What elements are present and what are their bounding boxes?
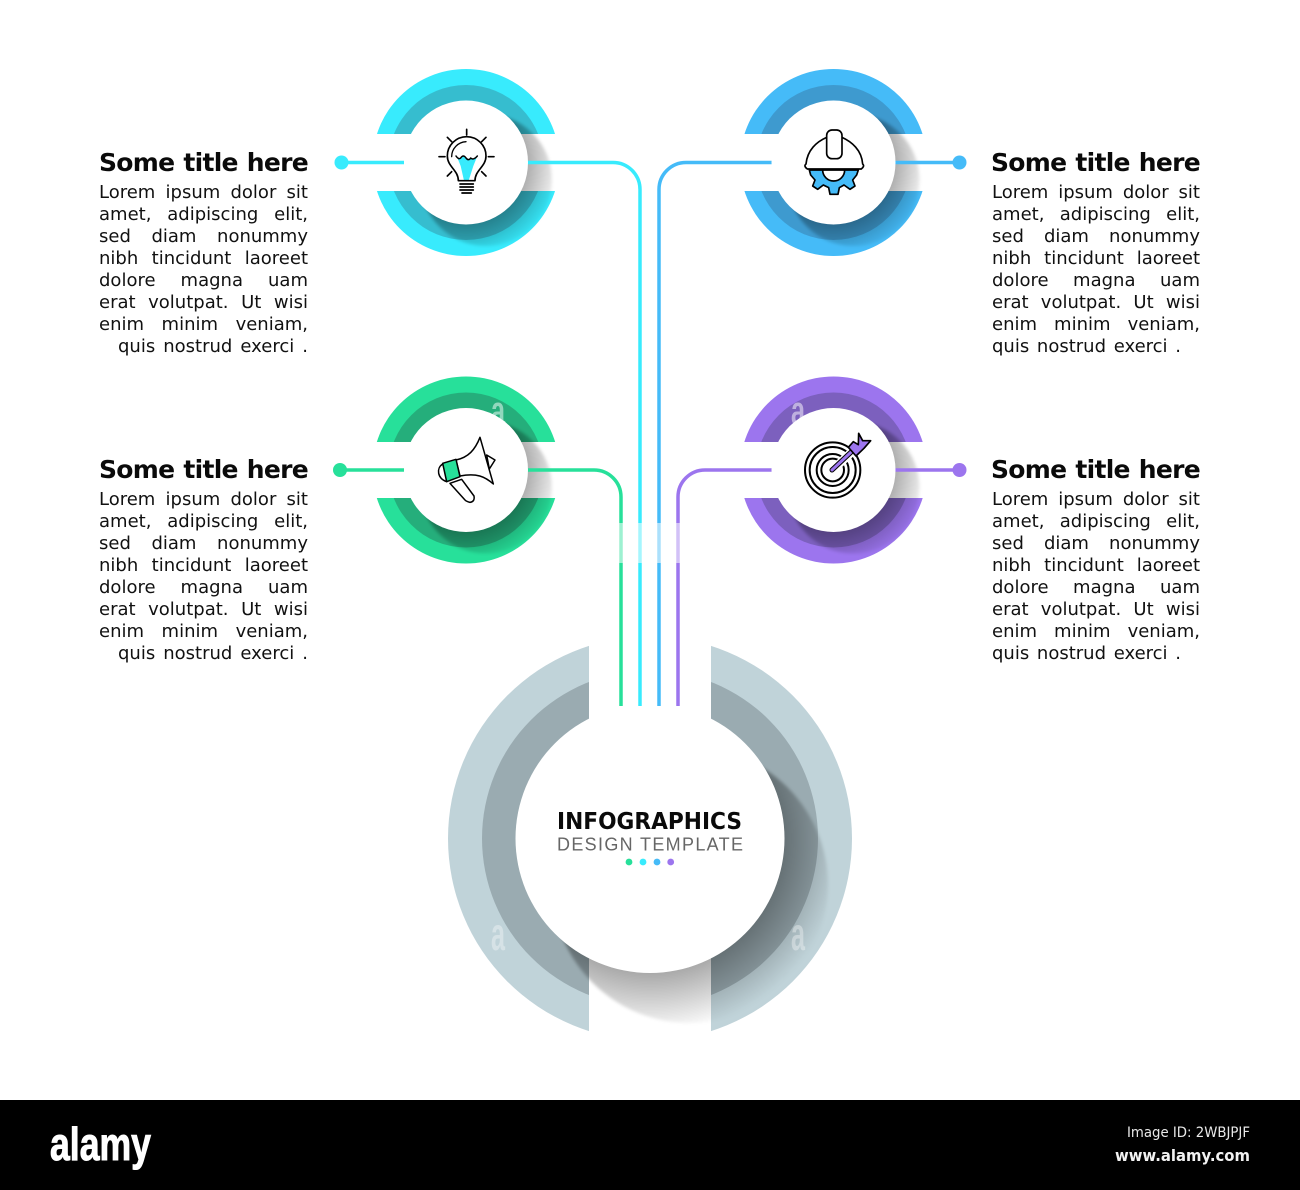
body text: erat volutpat. Ut wisi	[99, 292, 308, 313]
connector: purple	[678, 463, 966, 706]
icon: hard hat with gear	[805, 130, 864, 194]
heading: Some title here	[99, 455, 308, 484]
text block: bottom right	[991, 455, 1200, 664]
footer logo: alamy	[50, 1118, 151, 1170]
body text: quis nostrud exerci .	[992, 643, 1181, 664]
icon: light bulb	[439, 129, 494, 193]
body text: quis nostrud exerci .	[992, 336, 1181, 357]
connector: green	[333, 463, 621, 706]
text block: top left	[99, 148, 308, 357]
body text: sed diam nonummy	[992, 226, 1200, 247]
hub colour dots	[626, 859, 674, 865]
heading: Some title here	[99, 148, 308, 177]
footer url: www.alamy.com	[1115, 1146, 1250, 1165]
body text: amet, adipiscing elit,	[99, 204, 308, 225]
body text: erat volutpat. Ut wisi	[99, 599, 308, 620]
heading: Some title here	[991, 148, 1200, 177]
node disc: green	[404, 408, 528, 532]
body text: erat volutpat. Ut wisi	[992, 599, 1200, 620]
node ring: green: a	[491, 389, 505, 433]
node disc: blue	[772, 100, 896, 224]
body text: sed diam nonummy	[992, 533, 1200, 554]
body text	[99, 182, 308, 357]
body text: Lorem ipsum dolor sit	[99, 489, 308, 510]
node disc: purple	[772, 408, 896, 532]
heading: Some title here	[991, 455, 1200, 484]
hub subtitle: DESIGN TEMPLATE	[557, 834, 743, 854]
body text: dolore magna uam	[99, 577, 308, 598]
body text: dolore magna uam	[992, 270, 1200, 291]
central hub: grey split ring: a	[491, 908, 505, 960]
text block: bottom left	[99, 455, 308, 664]
body text: quis nostrud exerci .	[118, 643, 308, 664]
node ring: cyan	[372, 69, 560, 256]
body text: dolore magna uam	[992, 577, 1200, 598]
body text: dolore magna uam	[99, 270, 308, 291]
body text: nibh tincidunt laoreet	[992, 248, 1200, 269]
body text: enim minim veniam,	[992, 621, 1200, 642]
central hub: grey split ring	[448, 636, 852, 1040]
body text: enim minim veniam,	[99, 621, 308, 642]
body text: amet, adipiscing elit,	[99, 511, 308, 532]
body text: sed diam nonummy	[99, 226, 308, 247]
icon: megaphone	[438, 437, 495, 502]
body text: Lorem ipsum dolor sit	[992, 182, 1200, 203]
body text: enim minim veniam,	[99, 314, 308, 335]
footer bar	[0, 1100, 1300, 1190]
body text	[99, 489, 308, 664]
body text: erat volutpat. Ut wisi	[992, 292, 1200, 313]
node ring: purple: a	[791, 389, 805, 433]
body text: sed diam nonummy	[99, 533, 308, 554]
body text: amet, adipiscing elit,	[992, 511, 1200, 532]
icon: target with arrow	[805, 433, 871, 498]
node ring: green	[372, 376, 560, 564]
footer image id: Image ID: 2WBJPJF	[1127, 1125, 1250, 1141]
central hub: grey split ring: a	[791, 908, 805, 960]
body text: enim minim veniam,	[992, 314, 1200, 335]
body text: nibh tincidunt laoreet	[99, 555, 308, 576]
body text: nibh tincidunt laoreet	[992, 555, 1200, 576]
node disc: cyan	[404, 100, 528, 224]
body text: nibh tincidunt laoreet	[99, 248, 308, 269]
body text: quis nostrud exerci .	[118, 336, 308, 357]
node ring: blue	[740, 69, 927, 256]
connector: cyan	[334, 156, 640, 706]
body text: Lorem ipsum dolor sit	[99, 182, 308, 203]
text block: top right	[991, 148, 1200, 357]
hub title: INFOGRAPHICS	[557, 807, 742, 835]
body text	[992, 182, 1200, 357]
body text: amet, adipiscing elit,	[992, 204, 1200, 225]
body text	[992, 489, 1200, 664]
node ring: purple	[740, 376, 927, 564]
central hub disc	[516, 704, 784, 973]
body text: Lorem ipsum dolor sit	[992, 489, 1200, 510]
connector: blue	[659, 156, 966, 706]
